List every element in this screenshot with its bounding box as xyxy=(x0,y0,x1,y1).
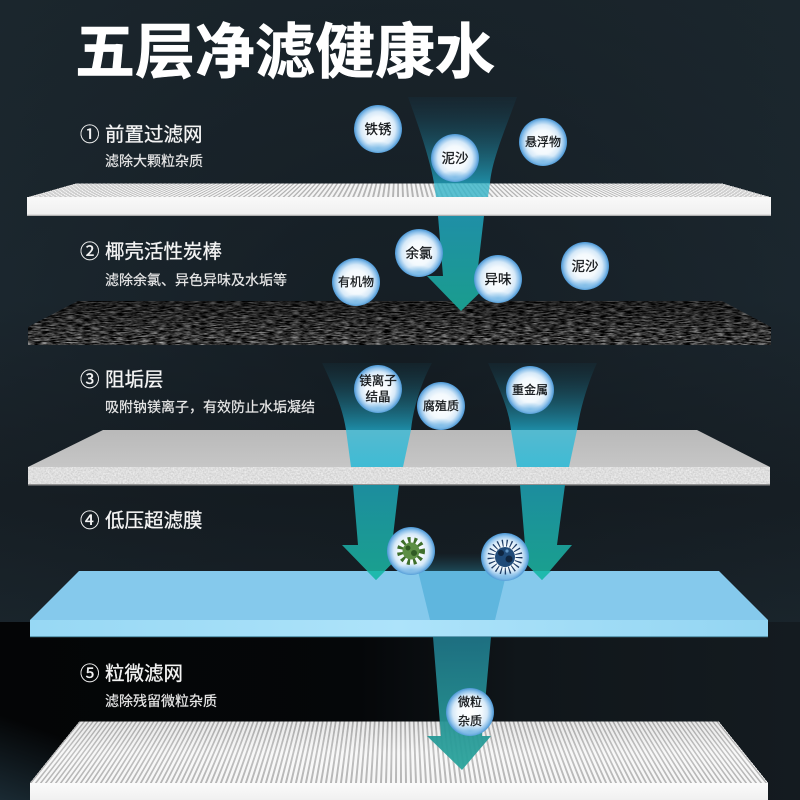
step 5 heading: 粒微滤网 xyxy=(105,663,183,685)
filter layer 3: scale inhibition xyxy=(28,430,770,486)
bubble: residual chlorine xyxy=(395,229,443,277)
arrow: layer 3 to layer 4 left xyxy=(342,485,410,580)
bubble: suspended matter: 悬浮物 xyxy=(525,135,561,149)
bubble: fine particles xyxy=(446,688,494,736)
bubble: organic matter xyxy=(332,258,380,306)
step 5 heading: ⑤ xyxy=(80,663,100,685)
arrow: left funnel into layer 3 xyxy=(322,363,432,467)
bubble: odour xyxy=(474,255,522,303)
step 2 heading: 椰壳活性炭棒 xyxy=(105,241,222,263)
bubble: organic matter: 有机物 xyxy=(338,275,374,289)
bubble: green virus xyxy=(387,527,435,575)
arrow: layer 4 to layer 5 xyxy=(427,637,491,770)
step 1 description: 滤除大颗粒杂质 xyxy=(105,153,203,169)
step 5 description: 滤除残留微粒杂质 xyxy=(105,693,217,709)
step 4 heading: 低压超滤膜 xyxy=(105,510,203,532)
step 2 heading: ② xyxy=(80,241,100,263)
bubble: silt xyxy=(431,134,479,182)
title: 五层净滤健康水 xyxy=(75,19,495,86)
arrow: layer 3 to layer 4 right xyxy=(508,485,572,580)
filter layer 4: ultrafiltration membrane xyxy=(30,571,768,637)
step 3 heading: ③ xyxy=(80,369,100,391)
bubble: blue virus xyxy=(481,533,529,581)
arrow: layer 1 to layer 2 xyxy=(427,216,497,311)
bubble: rust xyxy=(354,105,402,153)
bubble: humus: 腐殖质 xyxy=(423,399,459,413)
filter layer 5: micro particle mesh xyxy=(30,722,768,800)
arrow head tips over layer 4 xyxy=(367,571,551,580)
bubble: magnesium ion crystals: 镁离子 xyxy=(359,374,397,388)
filter layer 1: pre-filter mesh xyxy=(27,184,771,216)
bubble: heavy metals xyxy=(506,366,554,414)
step 2 description: 滤除余氯、异色异味及水垢等 xyxy=(105,272,287,288)
bubble: humus xyxy=(417,382,465,430)
bubble: odour: 异味 xyxy=(484,272,512,286)
bubble: rust: 铁锈 xyxy=(364,122,392,136)
bubble: silt: 泥沙 xyxy=(442,150,468,166)
arrow: right funnel into layer 3 xyxy=(488,363,597,467)
bubble: magnesium ion crystals xyxy=(354,365,402,413)
bubble: suspended matter xyxy=(519,118,567,166)
bubble: residual chlorine: 余氯 xyxy=(406,246,432,260)
bubble: magnesium ion crystals: 结晶 xyxy=(365,390,390,404)
step 1 heading: ① xyxy=(80,124,100,146)
bubble: heavy metals: 重金属 xyxy=(512,383,548,397)
arrow: water into layer 1 xyxy=(408,97,517,197)
step 1 heading: 前置过滤网 xyxy=(105,124,203,146)
bubble: silt xyxy=(561,242,609,290)
bubble: fine particles: 杂质 xyxy=(458,714,482,728)
step 3 description: 吸附钠镁离子，有效防止水垢凝结 xyxy=(105,399,315,415)
step 4 heading: ④ xyxy=(80,510,100,532)
arrow: funnel through layer 4 xyxy=(416,553,510,620)
filter layer 2: coconut shell carbon xyxy=(28,301,771,345)
bubble: fine particles: 微粒 xyxy=(458,695,482,709)
step 3 heading: 阻垢层 xyxy=(105,369,164,391)
bubble: silt: 泥沙 xyxy=(572,258,598,274)
